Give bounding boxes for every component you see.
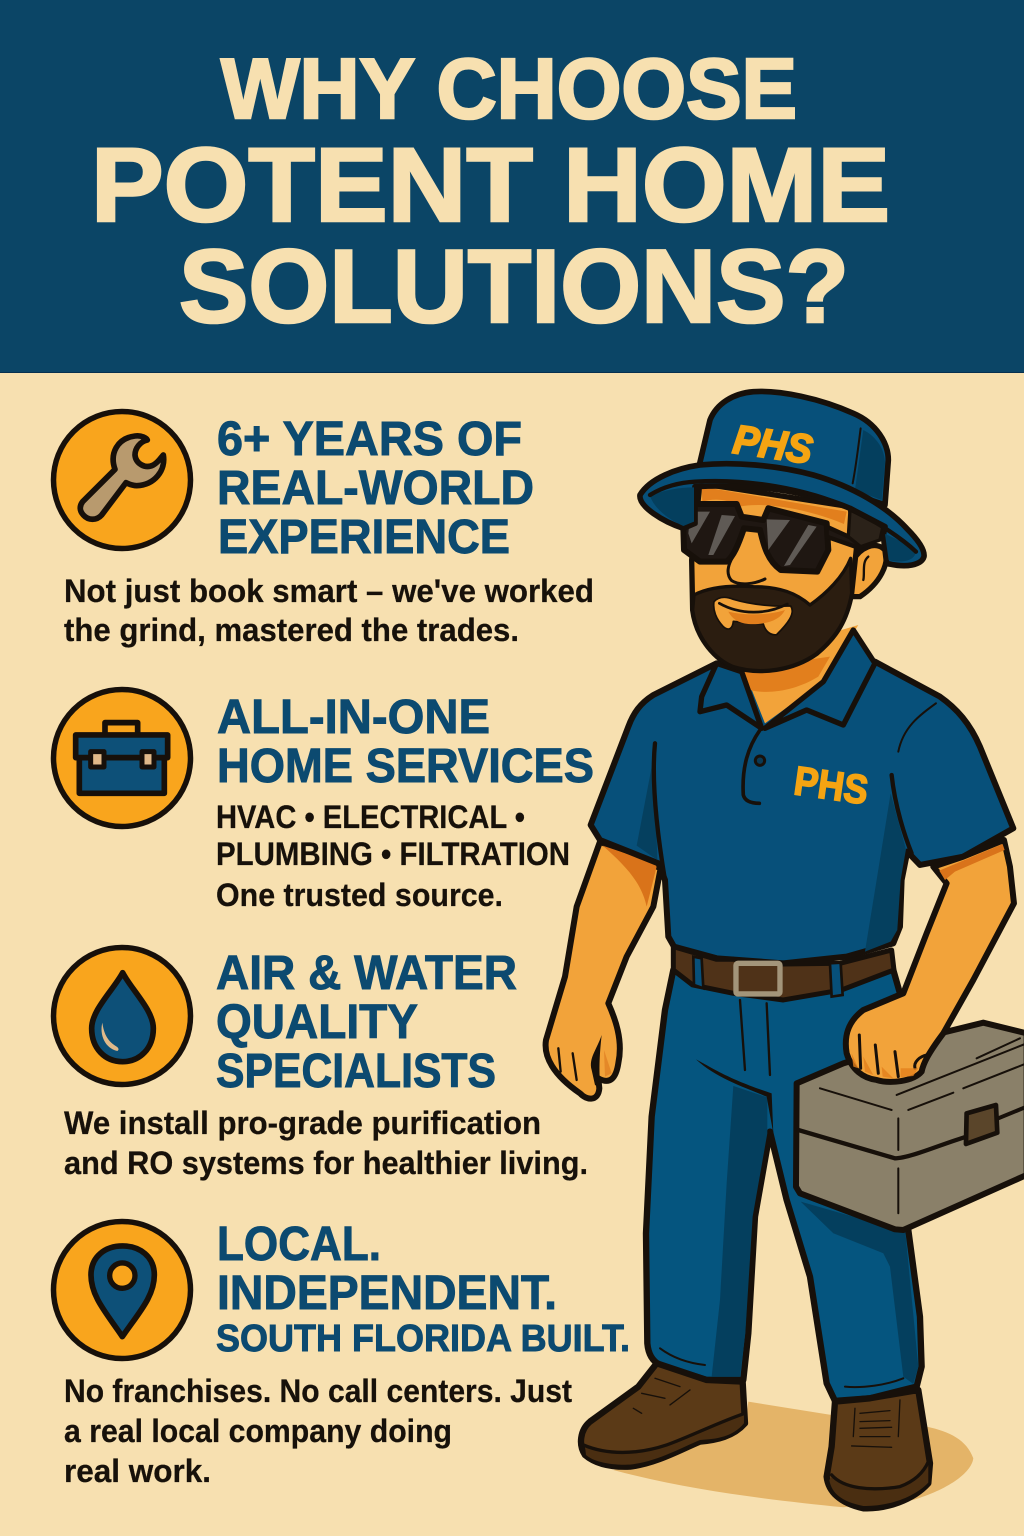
toolbox being carried <box>796 1023 1024 1230</box>
heading: local: INDEPENDENT. <box>217 1267 557 1320</box>
text: air and water description <box>64 1105 588 1181</box>
heading: services <box>217 691 594 793</box>
title: WHY CHOOSE <box>221 42 797 137</box>
icon: toolbox <box>54 690 190 826</box>
heading: air and water: QUALITY <box>216 996 418 1049</box>
collar and placket <box>700 630 875 803</box>
ground shadow <box>613 1402 973 1507</box>
heading: services: ALL-IN-ONE <box>217 691 490 744</box>
beard <box>693 558 852 671</box>
belt buckle <box>736 963 780 994</box>
heading: local: SOUTH FLORIDA BUILT. <box>216 1318 630 1360</box>
text: services description: HVAC • ELECTRICAL • <box>216 799 525 835</box>
text: experience description <box>64 573 594 648</box>
text: services description: PLUMBING • FILTRATION <box>216 836 570 872</box>
heading: local: LOCAL. <box>217 1218 381 1271</box>
mouth <box>714 597 792 635</box>
heading: local <box>216 1218 630 1360</box>
text: local description: real work. <box>64 1453 211 1489</box>
face <box>692 483 857 671</box>
boots <box>581 1363 930 1508</box>
text: air and water description: and RO systems for healthier living. <box>64 1145 588 1181</box>
heading: experience <box>217 413 534 564</box>
title <box>91 42 890 345</box>
trousers <box>646 970 922 1401</box>
shirt logo: PHS <box>791 757 871 813</box>
icon: water drop <box>54 948 190 1084</box>
heading: air and water: AIR & WATER <box>216 947 517 1000</box>
heading: experience: 6+ YEARS OF <box>217 413 522 466</box>
arm: right with hand on toolbox <box>846 840 1014 1082</box>
title: POTENT HOME <box>91 127 890 244</box>
hat <box>640 391 924 566</box>
heading: experience: REAL-WORLD <box>217 462 534 515</box>
panel: experience <box>54 412 594 648</box>
text: local description: No franchises. No call centers. Just <box>64 1373 572 1409</box>
neck <box>740 625 858 723</box>
text: experience description: the grind, mastered the trades. <box>64 612 519 648</box>
panel: air and water <box>54 947 588 1181</box>
text: air and water description: We install pro-grade purification <box>64 1105 541 1141</box>
head <box>640 391 924 671</box>
text: local description <box>64 1373 572 1489</box>
ear <box>850 546 886 597</box>
title: SOLUTIONS? <box>179 229 849 345</box>
text: local description: a real local company doing <box>64 1413 452 1449</box>
text: services description <box>216 799 570 913</box>
hat logo: PHS <box>730 416 815 473</box>
illustration: technician mascot <box>546 391 1024 1508</box>
panel: local <box>54 1218 630 1489</box>
belt <box>673 947 894 1000</box>
heading: air and water: SPECIALISTS <box>216 1045 496 1098</box>
heading: experience: EXPERIENCE <box>218 511 510 564</box>
toolbox latch <box>966 1105 997 1144</box>
text: experience description: Not just book smart – we've worked <box>64 573 594 609</box>
text: services description: One trusted source. <box>216 877 503 913</box>
arm: left <box>546 842 661 1099</box>
header banner <box>0 0 1024 373</box>
sunglasses <box>683 504 863 572</box>
panel: services <box>54 690 594 913</box>
nose <box>728 553 765 584</box>
icon: wrench <box>54 412 190 548</box>
icon: map pin <box>54 1222 190 1358</box>
shirt <box>591 625 1013 963</box>
heading: services: HOME SERVICES <box>217 740 594 793</box>
heading: air and water <box>216 947 517 1098</box>
